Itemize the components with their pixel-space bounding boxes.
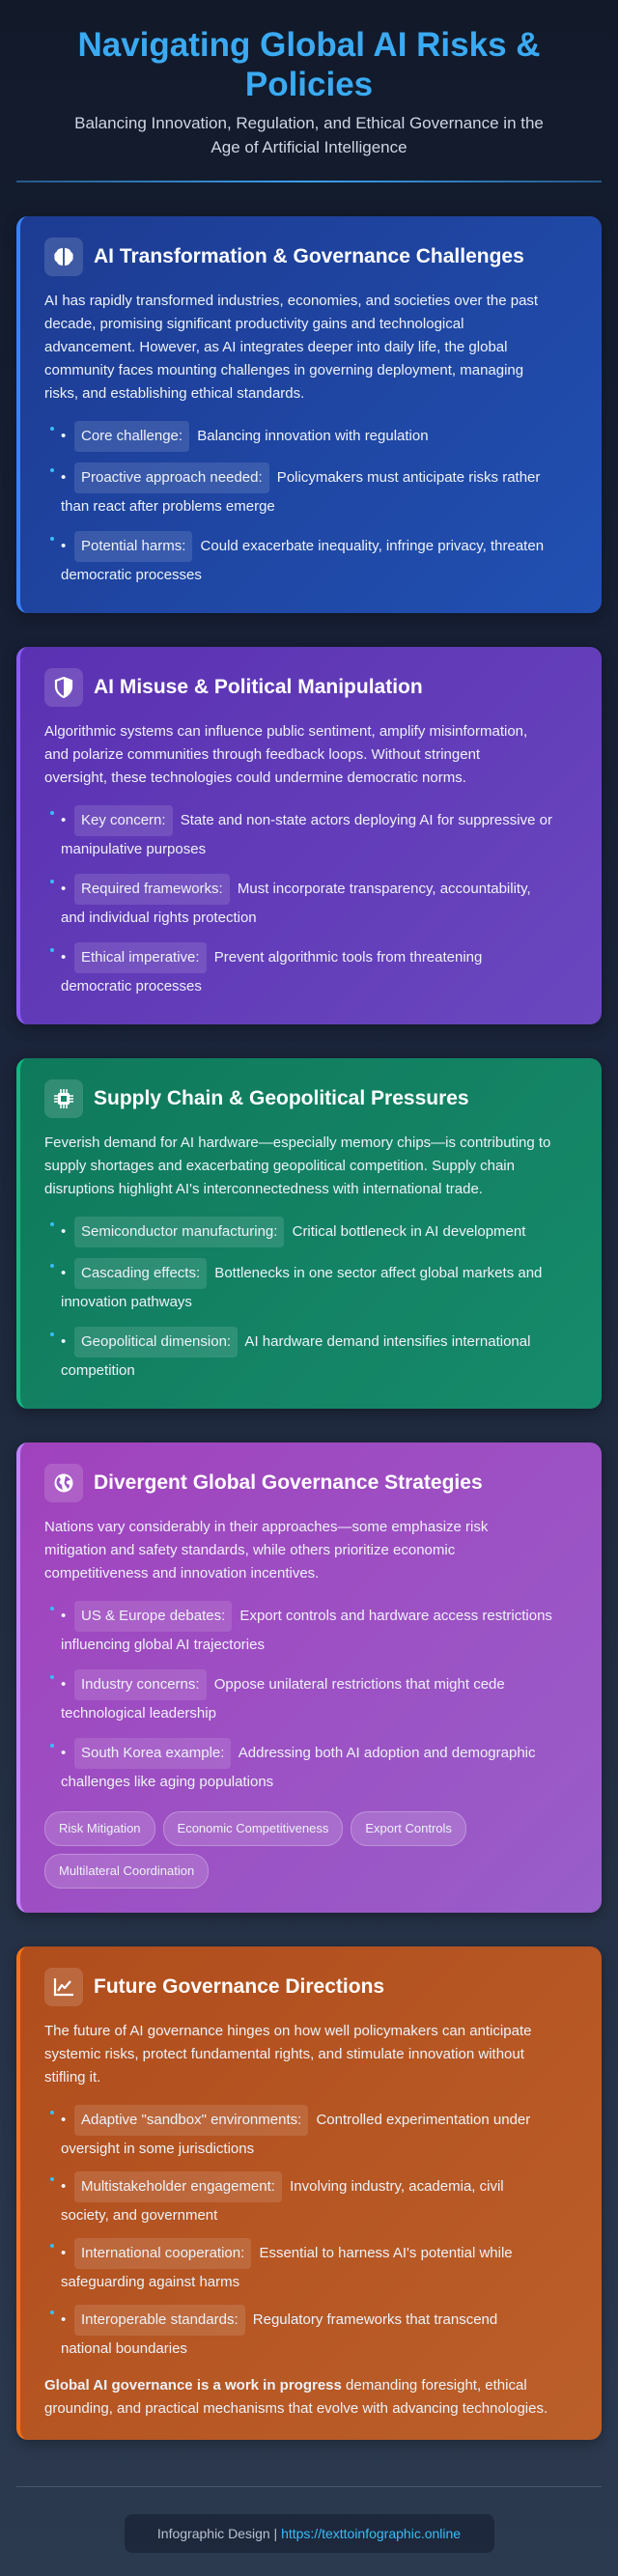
heading: AI misuse: AI Misuse & Political Manipulation bbox=[94, 676, 423, 698]
text block: competitiveness and innovation incentives. bbox=[44, 1565, 319, 1582]
footer: Infographic Design | https://texttoinfographic.online bbox=[157, 2526, 461, 2541]
bullet list: • bbox=[61, 1745, 66, 1761]
bullet list: • bbox=[61, 1265, 66, 1281]
heading: supply chain bbox=[44, 1079, 469, 1118]
bullet list: Regulatory frameworks that transcend bbox=[253, 2311, 497, 2328]
bullet list: national boundaries bbox=[61, 2340, 187, 2357]
bullet list: Ethical imperative: bbox=[81, 949, 200, 966]
bullet list: • bbox=[61, 949, 66, 966]
heading: future directions bbox=[44, 1968, 384, 2006]
bullet list: • bbox=[61, 812, 66, 828]
title bbox=[77, 26, 541, 103]
bullet list: Involving industry, academia, civil bbox=[290, 2178, 504, 2195]
bullet list bbox=[50, 2105, 530, 2357]
bullet list: State and non-state actors deploying AI for suppressive or bbox=[181, 812, 552, 828]
heading: AI misuse bbox=[44, 668, 423, 707]
panel: future directions bbox=[16, 1946, 602, 2440]
text block: supply shortages and exacerbating geopolitical competition. Supply chain bbox=[44, 1158, 515, 1174]
text block: mitigation and safety standards, while others prioritize economic bbox=[44, 1542, 455, 1558]
bullet list: Bottlenecks in one sector affect global markets and bbox=[214, 1265, 542, 1281]
subtitle: Age of Artificial Intelligence bbox=[211, 138, 407, 156]
bullet list: • bbox=[61, 2311, 66, 2328]
footer bbox=[124, 2514, 494, 2553]
heading: future directions: Future Governance Directions bbox=[94, 1975, 384, 1998]
panel: supply chain bbox=[16, 1058, 602, 1409]
bullet list: competition bbox=[61, 1362, 135, 1379]
heading: AI transformation: AI Transformation & Governance Challenges bbox=[94, 245, 524, 267]
bullet list: • bbox=[61, 2112, 66, 2128]
text block: advancement. However, as AI integrates deeper into daily life, the global bbox=[44, 339, 507, 355]
tags: Risk Mitigation bbox=[59, 1821, 141, 1835]
bullet list: Proactive approach needed: bbox=[81, 469, 263, 486]
bullet list: Multistakeholder engagement: bbox=[81, 2178, 275, 2195]
text block: AI has rapidly transformed industries, economies, and societies over the past bbox=[44, 293, 538, 309]
text block bbox=[44, 2023, 531, 2086]
text block bbox=[44, 1519, 489, 1582]
bullet list: Cascading effects: bbox=[81, 1265, 200, 1281]
text block bbox=[44, 293, 538, 402]
title: Policies bbox=[245, 66, 373, 103]
text block: disruptions highlight AI's interconnectedness with international trade. bbox=[44, 1181, 483, 1197]
summary text: grounding, and practical mechanisms that evolve with advancing technologies. bbox=[44, 2400, 548, 2417]
bullet list: Policymakers must anticipate risks rather bbox=[277, 469, 540, 486]
bullet list: Oppose unilateral restrictions that might cede bbox=[214, 1676, 505, 1693]
bullet list bbox=[50, 1601, 552, 1790]
bullet list: Must incorporate transparency, accountability, bbox=[238, 881, 531, 897]
panel: AI transformation bbox=[16, 216, 602, 613]
text block: stifling it. bbox=[44, 2069, 100, 2086]
bullet list: • bbox=[61, 469, 66, 486]
title: Navigating Global AI Risks & bbox=[77, 26, 541, 64]
bullet list: Controlled experimentation under bbox=[316, 2112, 530, 2128]
text block: The future of AI governance hinges on how well policymakers can anticipate bbox=[44, 2023, 531, 2039]
bullet list: • bbox=[61, 881, 66, 897]
bullet list: Core challenge: bbox=[81, 428, 183, 444]
tags: Export Controls bbox=[365, 1821, 452, 1835]
bullet list bbox=[50, 805, 552, 994]
bullet list: oversight in some jurisdictions bbox=[61, 2141, 254, 2157]
bullet list: Key concern: bbox=[81, 812, 166, 828]
bullet list: technological leadership bbox=[61, 1705, 216, 1722]
text block: Feverish demand for AI hardware—especially memory chips—is contributing to bbox=[44, 1134, 550, 1151]
heading: divergent strategies bbox=[44, 1464, 483, 1502]
bullet list: • bbox=[61, 1608, 66, 1624]
bullet list: • bbox=[61, 1223, 66, 1240]
bullet list: Industry concerns: bbox=[81, 1676, 200, 1693]
bullet list: influencing global AI trajectories bbox=[61, 1637, 265, 1653]
bullet list: innovation pathways bbox=[61, 1294, 192, 1310]
text block: Nations vary considerably in their approaches—some emphasize risk bbox=[44, 1519, 488, 1535]
bullet list: Interoperable standards: bbox=[81, 2311, 239, 2328]
bullet list: US & Europe debates: bbox=[81, 1608, 225, 1624]
bullet list: • bbox=[61, 1676, 66, 1693]
text block: systemic risks, protect fundamental rights, and stimulate innovation without bbox=[44, 2046, 524, 2062]
tags: Multilateral Coordination bbox=[59, 1863, 194, 1878]
bullet list: • bbox=[61, 2245, 66, 2261]
heading: supply chain: Supply Chain & Geopolitical Pressures bbox=[94, 1087, 469, 1109]
bullet list: Essential to harness AI's potential while bbox=[259, 2245, 513, 2261]
heading: divergent strategies: Divergent Global Governance Strategies bbox=[94, 1471, 483, 1494]
text block: decade, promising significant productivity gains and technological bbox=[44, 316, 464, 332]
bullet list: South Korea example: bbox=[81, 1745, 224, 1761]
bullet list: democratic processes bbox=[61, 567, 202, 583]
bullet list: AI hardware demand intensifies international bbox=[244, 1333, 530, 1350]
bullet list bbox=[50, 421, 544, 583]
panel: divergent strategies bbox=[16, 1442, 602, 1913]
bullet list: Adaptive "sandbox" environments: bbox=[81, 2112, 301, 2128]
text block bbox=[44, 723, 527, 786]
bullet list: Required frameworks: bbox=[81, 881, 223, 897]
bullet list: • bbox=[61, 428, 66, 444]
text block: risks, and establishing ethical standards. bbox=[44, 385, 304, 402]
text block: oversight, these technologies could undermine democratic norms. bbox=[44, 770, 466, 786]
bullet list: • bbox=[61, 2178, 66, 2195]
bullet list: • bbox=[61, 1333, 66, 1350]
tags bbox=[44, 1811, 466, 1889]
summary text bbox=[44, 2377, 548, 2417]
bullet list: Geopolitical dimension: bbox=[81, 1333, 231, 1350]
bullet list: Addressing both AI adoption and demographic bbox=[239, 1745, 535, 1761]
text block bbox=[44, 1134, 550, 1197]
bullet list: and individual rights protection bbox=[61, 910, 257, 926]
panel: AI misuse bbox=[16, 647, 602, 1024]
bullet list: Critical bottleneck in AI development bbox=[293, 1223, 525, 1240]
bullet list: International cooperation: bbox=[81, 2245, 244, 2261]
bullet list: Semiconductor manufacturing: bbox=[81, 1223, 277, 1240]
bullet list: safeguarding against harms bbox=[61, 2274, 239, 2290]
text block: and polarize communities through feedback loops. Without stringent bbox=[44, 746, 480, 763]
text block: Algorithmic systems can influence public sentiment, amplify misinformation, bbox=[44, 723, 527, 740]
bullet list: Potential harms: bbox=[81, 538, 185, 554]
summary text: Global AI governance is a work in progress demanding foresight, ethical bbox=[44, 2377, 527, 2394]
subtitle bbox=[74, 114, 544, 156]
bullet list: Prevent algorithmic tools from threatening bbox=[214, 949, 482, 966]
bullet list: Balancing innovation with regulation bbox=[197, 428, 429, 444]
bullet list: society, and government bbox=[61, 2207, 217, 2224]
bullet list: democratic processes bbox=[61, 978, 202, 994]
subtitle: Balancing Innovation, Regulation, and Ethical Governance in the bbox=[74, 114, 544, 132]
bullet list: challenges like aging populations bbox=[61, 1774, 273, 1790]
heading: AI transformation bbox=[44, 238, 524, 276]
tags: Economic Competitiveness bbox=[178, 1821, 328, 1835]
text block: community faces mounting challenges in governing deployment, managing bbox=[44, 362, 523, 378]
bullet list: than react after problems emerge bbox=[61, 498, 275, 515]
bullet list: • bbox=[61, 538, 66, 554]
bullet list: Could exacerbate inequality, infringe privacy, threaten bbox=[201, 538, 544, 554]
bullet list bbox=[50, 1217, 542, 1379]
bullet list: Export controls and hardware access restrictions bbox=[239, 1608, 552, 1624]
bullet list: manipulative purposes bbox=[61, 841, 206, 857]
